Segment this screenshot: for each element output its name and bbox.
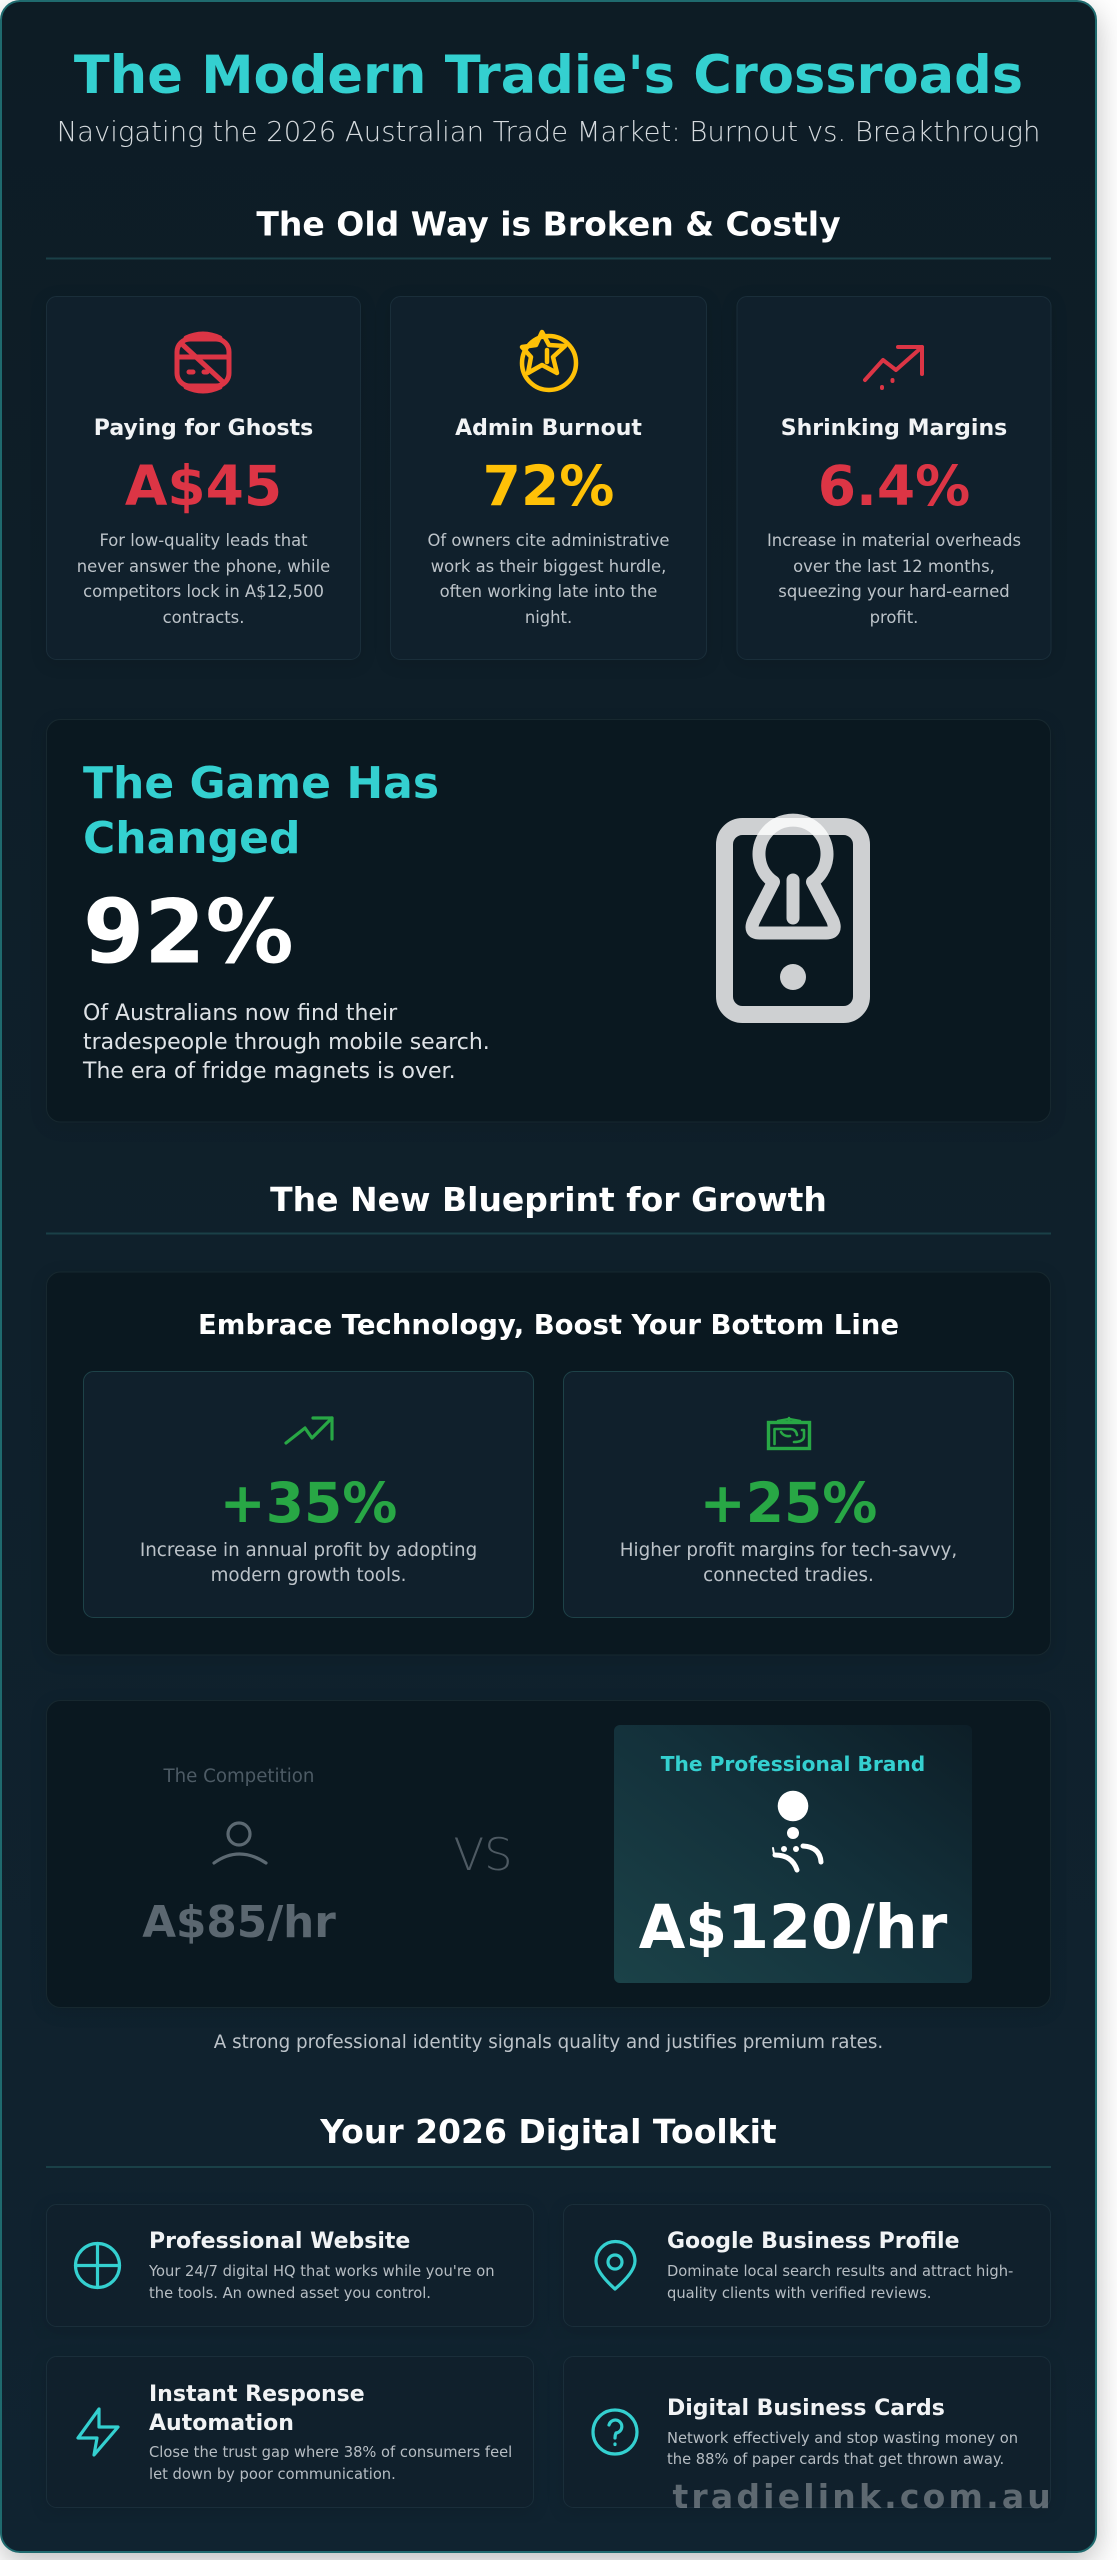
description: let down by poor communication.: [149, 2466, 396, 2483]
panel: shrinking margins: [737, 296, 1051, 660]
title: The Modern Tradie's Crossroads: [74, 45, 1023, 106]
stat: +25%: [700, 1471, 877, 1535]
toolkit item: instant response automation: [46, 2356, 534, 2508]
title: Professional Website: [149, 2229, 410, 2254]
stat: A$45: [125, 454, 282, 518]
label: Admin Burnout: [455, 416, 642, 441]
description: [82, 1001, 490, 1084]
versus: VS: [453, 1828, 513, 1881]
panel: competition vs professional brand: [46, 1700, 1050, 2008]
icon: no-phone ghost: [177, 334, 229, 391]
description: over the last 12 months,: [793, 557, 995, 576]
icon: lightning bolt: [78, 2409, 118, 2455]
description: Of Australians now find their: [83, 1001, 398, 1026]
panel: paying for ghosts: [46, 296, 360, 660]
description: squeezing your hard-earned: [778, 582, 1010, 601]
description: Increase in annual profit by adopting: [140, 1540, 477, 1561]
heading: The Game Has: [83, 758, 439, 809]
label: Shrinking Margins: [781, 416, 1007, 441]
section heading: new blueprint: The New Blueprint for Growth: [270, 1180, 827, 1219]
toolkit item: google business profile: [564, 2204, 1050, 2326]
icon: phone with keyhole: [724, 820, 862, 1014]
description: the 88% of paper cards that get thrown away.: [667, 2451, 1004, 2468]
panel: the game has changed: [46, 720, 1050, 1122]
title: Automation: [149, 2411, 294, 2436]
description: Higher profit margins for tech-savvy,: [620, 1540, 957, 1561]
description: often working late into the: [440, 582, 657, 601]
description: night.: [525, 608, 572, 627]
description: [77, 531, 330, 627]
label: The Professional Brand: [661, 1752, 925, 1776]
description: never answer the phone, while: [77, 557, 330, 576]
description: contracts.: [163, 608, 244, 627]
icon: chart arrow: [865, 347, 922, 388]
panel: embrace technology: [46, 1272, 1050, 1655]
section heading: the old way: The Old Way is Broken & Costly: [256, 204, 841, 244]
title: Instant Response: [149, 2382, 365, 2407]
rate: A$120/hr: [639, 1893, 948, 1963]
stat: 72%: [483, 454, 614, 518]
description: quality clients with verified reviews.: [667, 2285, 931, 2302]
icon: globe: [76, 2244, 120, 2288]
sub-panel: +25%: [564, 1372, 1014, 1618]
description: [667, 2263, 1013, 2302]
subtitle: Navigating the 2026 Australian Trade Market: Burnout vs. Breakthrough: [57, 116, 1040, 148]
description: Increase in material overheads: [767, 531, 1021, 550]
section heading: digital toolkit: Your 2026 Digital Toolkit: [319, 2112, 777, 2151]
description: Your 24/7 digital HQ that works while you're on: [148, 2263, 495, 2280]
description: Of owners cite administrative: [428, 531, 670, 550]
label: Paying for Ghosts: [94, 416, 313, 441]
description: [767, 531, 1021, 627]
description: modern growth tools.: [211, 1565, 406, 1586]
description: Dominate local search results and attract high-: [667, 2263, 1013, 2280]
description: [428, 531, 670, 627]
heading: Embrace Technology, Boost Your Bottom Line: [198, 1309, 899, 1341]
professional brand box: [614, 1725, 972, 1983]
description: competitors lock in A$12,500: [83, 582, 324, 601]
watermark: tradielink.com.au: [672, 2477, 1054, 2516]
description: [148, 2263, 495, 2302]
description: The era of fridge magnets is over.: [82, 1059, 456, 1084]
description: [140, 1540, 477, 1586]
description: Network effectively and stop wasting money on: [667, 2430, 1018, 2447]
icon: professional person: [773, 1791, 821, 1870]
icon: map pin: [596, 2242, 635, 2289]
toolkit item: digital business cards: [564, 2356, 1050, 2508]
description: the tools. An owned asset you control.: [149, 2285, 431, 2302]
icon: money: [768, 1418, 810, 1448]
title: Digital Business Cards: [667, 2396, 945, 2421]
icon: question mark: [593, 2410, 637, 2454]
toolkit item: professional website: [46, 2204, 534, 2326]
heading: [83, 758, 439, 864]
description: Close the trust gap where 38% of consumers feel: [149, 2444, 512, 2461]
description: For low-quality leads that: [99, 531, 308, 550]
stat: 6.4%: [818, 454, 970, 518]
title: Google Business Profile: [667, 2229, 960, 2254]
title: [149, 2382, 365, 2436]
header: [57, 45, 1040, 148]
description: work as their biggest hurdle,: [431, 557, 666, 576]
icon: star in circle: [522, 332, 576, 390]
stat: +35%: [220, 1471, 397, 1535]
description: connected tradies.: [703, 1565, 874, 1586]
icon: trending up: [286, 1418, 332, 1443]
caption: A strong professional identity signals quality and justifies premium rates.: [214, 2032, 883, 2053]
description: [620, 1540, 957, 1586]
stat: 92%: 92%: [83, 880, 294, 984]
sub-panel: +35%: [84, 1372, 534, 1618]
description: profit.: [870, 608, 918, 627]
description: [149, 2444, 512, 2483]
competition column: [142, 1766, 336, 1948]
heading: Changed: [83, 813, 300, 864]
icon: user: [214, 1823, 266, 1863]
description: tradespeople through mobile search.: [83, 1030, 490, 1055]
panel: admin burnout: [390, 296, 706, 660]
rate: A$85/hr: [142, 1897, 336, 1948]
label: The Competition: [163, 1766, 314, 1787]
description: [667, 2430, 1018, 2468]
